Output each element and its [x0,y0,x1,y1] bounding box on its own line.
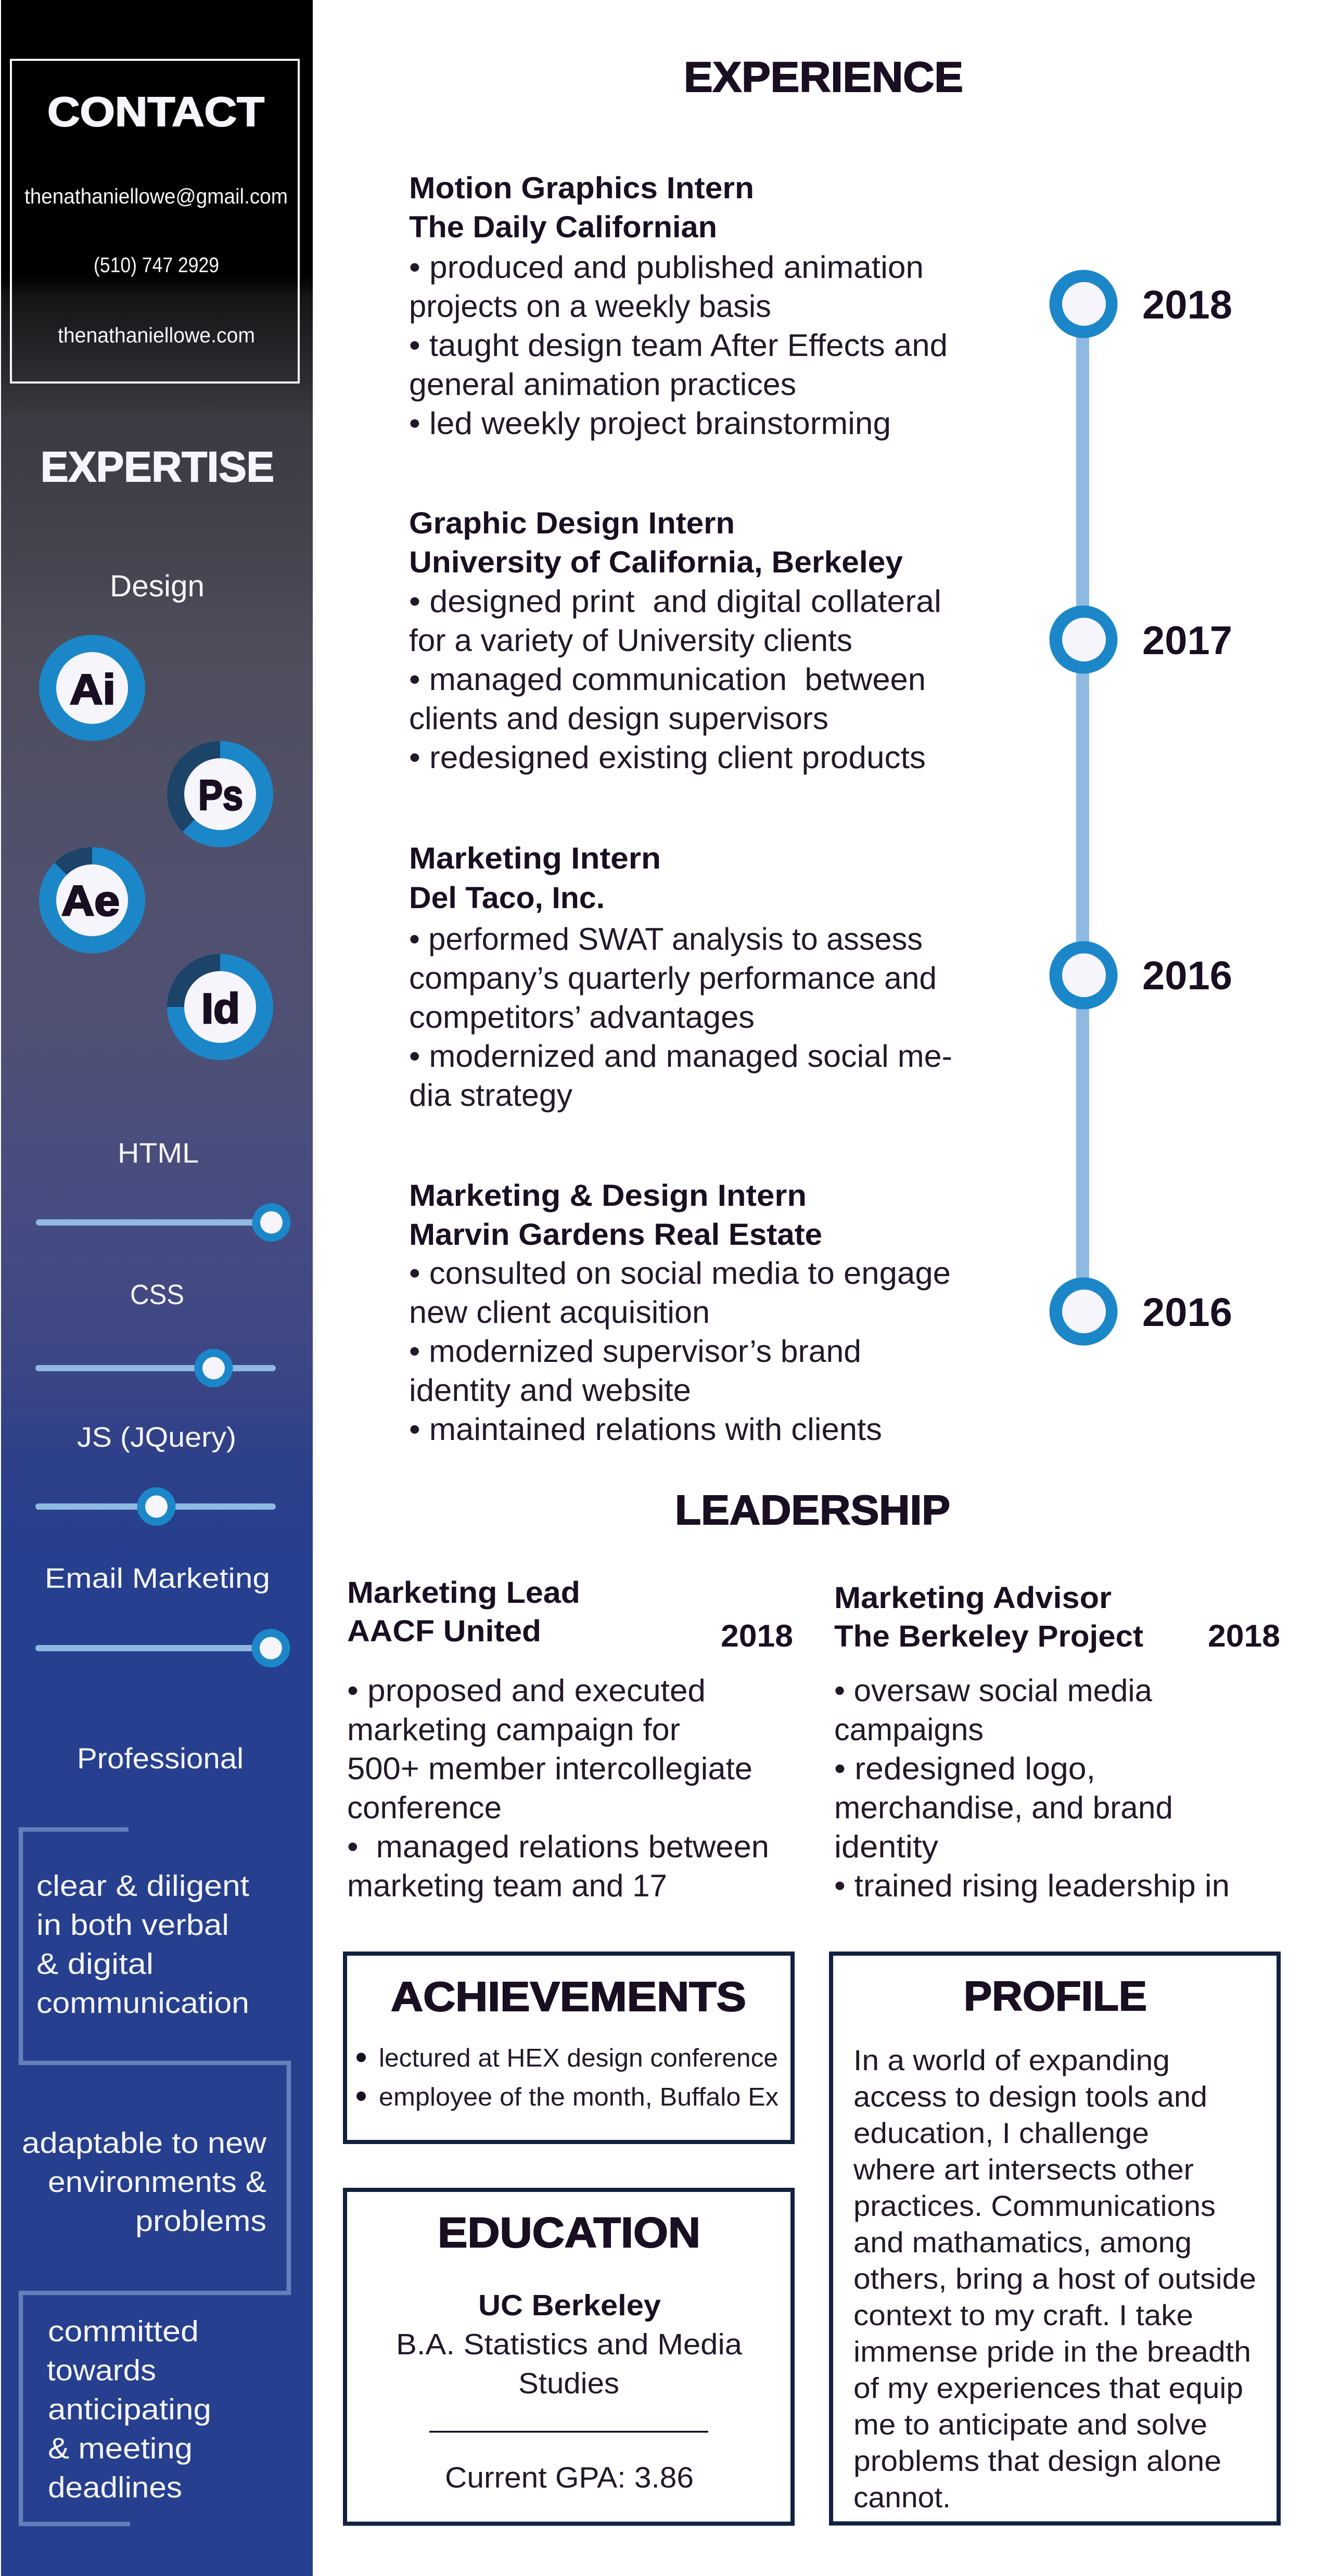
profile paragraph: of my experiences that equip [853,2371,1243,2404]
leadership: marketing advisor: • redesigned logo, [834,1751,1095,1786]
job: motion graphics intern: • led weekly project brainstorming [409,406,891,441]
job: marketing intern: • modernized and managed social me- [409,1039,952,1074]
heading: education: EDUCATION [438,2209,700,2256]
job: marketing and design intern: Marketing & Design Intern [409,1179,807,1213]
text: adaptable: adaptable to new [22,2126,267,2160]
subheading: design: Design [110,569,205,603]
job: marketing and design intern: new client acquisition [409,1295,710,1330]
degree [396,2328,742,2400]
profile paragraph: cannot. [853,2481,951,2514]
leadership: marketing advisor: • trained rising leadership in [834,1868,1230,1903]
donut chart: Id: Id [201,985,240,1032]
degree: B.A. Statistics and Media [396,2328,742,2361]
job: graphic design intern [409,506,941,775]
job: marketing intern: competitors’ advantages [409,1000,755,1035]
timeline node: 2018: 2018 [1142,283,1232,327]
leadership: marketing advisor: • oversaw social media [834,1673,1153,1708]
contact email: thenathaniellowe@gmail.com [24,184,288,208]
leadership: marketing lead: • managed relations between [347,1829,769,1864]
skill: email marketing [35,1563,290,1667]
profile paragraph: practices. Communications [853,2189,1216,2222]
job: marketing intern: • performed SWAT analysis to assess [409,922,923,957]
skill: HTML [36,1138,290,1242]
text: committed: committed [48,2315,199,2348]
donut chart: Id [167,954,273,1060]
job: motion graphics intern: • taught design team After Effects and [409,328,948,363]
timeline node: 2016 second: 2016 [1142,1290,1232,1335]
panel: sidebar [1,0,313,2576]
profile paragraph: and mathamatics, among [853,2226,1192,2259]
text: adaptable: problems [135,2204,266,2238]
leadership: marketing lead: 2018 [721,1618,793,1653]
job: motion graphics intern: Motion Graphics Intern [409,171,754,205]
degree: Studies [518,2367,619,2400]
panel: contact [11,60,299,382]
job: motion graphics intern: The Daily Californian [409,210,717,244]
timeline node: 2016: 2016 [1142,953,1232,998]
timeline node: 2016 second [1049,1277,1232,1346]
text: committed: towards [47,2354,156,2387]
heading: achievements: ACHIEVEMENTS [391,1973,746,2020]
profile paragraph [853,2044,1256,2514]
skill: email marketing: Email Marketing [45,1563,270,1594]
job: motion graphics intern: projects on a weekly basis [409,289,771,324]
leadership: marketing advisor [834,1581,1280,1903]
job: marketing and design intern [409,1179,951,1447]
leadership: marketing lead: marketing campaign for [347,1712,680,1747]
school name: UC Berkeley [478,2289,661,2322]
heading: leadership: LEADERSHIP [675,1487,950,1533]
leadership: marketing advisor: 2018 [1208,1618,1280,1653]
job: graphic design intern: • designed print and digital collateral [409,584,941,619]
skill: JS [35,1422,276,1526]
timeline node: 2016 [1049,941,1232,1010]
job: marketing intern [409,841,952,1113]
gpa: Current GPA: 3.86 [445,2461,694,2494]
panel: education [345,2190,793,2524]
job: marketing intern: company’s quarterly performance and [409,961,937,996]
donut chart: Ae: Ae [61,877,120,925]
profile paragraph: access to design tools and [853,2080,1207,2113]
job: marketing and design intern: Marvin Gardens Real Estate [409,1218,822,1252]
profile paragraph: context to my craft. I take [853,2299,1193,2331]
leadership: marketing lead: • proposed and executed [347,1673,706,1708]
skill: JS: JS (JQuery) [77,1422,236,1453]
achievement: lecture: lectured at HEX design conference [379,2044,778,2072]
panel: achievements [345,1954,793,2142]
profile paragraph: where art intersects other [853,2153,1194,2186]
leadership: marketing lead: marketing team and 17 [347,1868,667,1903]
text: clear and diligent [36,1869,249,2020]
profile paragraph: immense pride in the breadth [853,2335,1251,2368]
job: graphic design intern: Graphic Design Intern [409,506,735,540]
leadership: marketing advisor: The Berkeley Project [834,1619,1143,1653]
leadership: marketing advisor: campaigns [834,1712,984,1747]
text: clear and diligent: & digital [36,1947,154,1981]
skill: HTML: HTML [118,1138,199,1169]
donut chart: Ai [39,635,145,741]
skill: CSS: CSS [130,1279,184,1310]
job: graphic design intern: for a variety of University clients [409,623,852,658]
timeline node: 2018 [1049,270,1232,338]
panel: profile [831,1954,1279,2523]
heading: contact: CONTACT [47,88,264,135]
text: committed: deadlines [48,2471,182,2504]
text: adaptable [22,2126,267,2238]
job: marketing intern: dia strategy [409,1078,572,1113]
job: motion graphics intern [409,171,948,441]
job: marketing and design intern: • maintained relations with clients [409,1412,882,1447]
text: committed: anticipating [48,2393,211,2426]
connector: s-shaped line [21,1830,289,2524]
text: clear and diligent: communication [36,1986,249,2020]
leadership: marketing lead: 500+ member intercollegiate [347,1751,752,1786]
job: motion graphics intern: • produced and published animation [409,250,924,285]
text: clear and diligent: in both verbal [36,1908,229,1942]
profile paragraph: In a world of expanding [853,2044,1170,2076]
profile paragraph: problems that design alone [853,2444,1221,2477]
job: graphic design intern: clients and design supervisors [409,701,828,736]
job: marketing and design intern: identity and website [409,1373,691,1408]
leadership: marketing lead: AACF United [347,1614,541,1648]
leadership: marketing lead: Marketing Lead [347,1576,580,1610]
donut chart: Ai: Ai [70,666,116,713]
leadership: marketing advisor: identity [834,1829,938,1864]
skill: CSS [35,1279,276,1387]
text: committed: & meeting [48,2432,193,2465]
contact phone: (510) 747 2929 [94,253,219,277]
job: graphic design intern: • redesigned existing client products [409,740,926,775]
job: graphic design intern: University of California, Berkeley [409,545,903,579]
heading: experience: EXPERIENCE [684,54,963,101]
job: motion graphics intern: general animation practices [409,367,796,402]
timeline [1049,270,1232,1346]
donut chart: Ae [39,847,145,953]
text: adaptable: environments & [48,2165,266,2199]
heading: expertise: EXPERTISE [41,443,274,491]
donut chart: Ps: Ps [198,772,243,819]
job: marketing and design intern: • consulted on social media to engage [409,1256,951,1291]
job: graphic design intern: • managed communication between [409,662,926,697]
profile paragraph: me to anticipate and solve [853,2408,1207,2441]
profile paragraph: others, bring a host of outside [853,2262,1256,2295]
achievement: employee of the month: employee of the month, Buffalo Ex [379,2083,779,2111]
leadership: marketing lead: conference [347,1790,502,1825]
text: clear and diligent: clear & diligent [36,1869,249,1903]
job: marketing and design intern: • modernized supervisor’s brand [409,1334,861,1369]
timeline node: 2017 [1049,606,1232,673]
text: committed [47,2315,211,2504]
profile paragraph: education, I challenge [853,2116,1149,2149]
leadership: marketing advisor: Marketing Advisor [834,1581,1112,1615]
timeline node: 2017: 2017 [1142,618,1232,663]
leadership: marketing advisor: merchandise, and brand [834,1790,1173,1825]
donut chart: Ps [167,741,273,847]
leadership: marketing lead [347,1576,793,1903]
subheading: professional: Professional [77,1742,244,1775]
job: marketing intern: Del Taco, Inc. [409,881,605,915]
job: marketing intern: Marketing Intern [409,841,661,875]
contact website: thenathaniellowe.com [58,323,255,347]
heading: profile: PROFILE [964,1973,1147,2019]
